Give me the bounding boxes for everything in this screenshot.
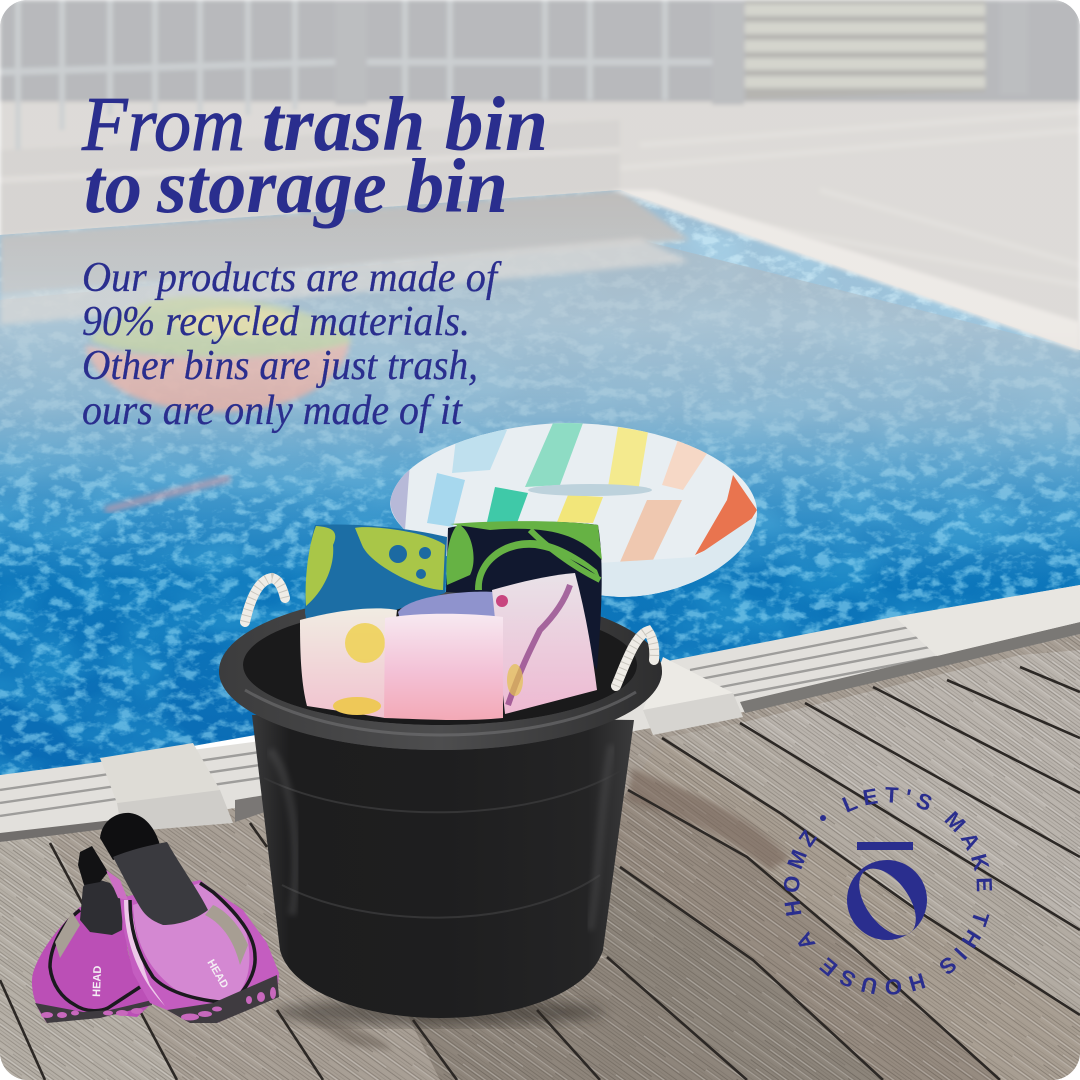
fin brand text: HEAD <box>204 958 230 991</box>
bucket front rim <box>219 665 662 750</box>
swimming pool water <box>0 180 1080 790</box>
subtitle text block: ours are only made of it <box>82 388 463 434</box>
right fin <box>100 813 279 1023</box>
bucket shadow <box>275 998 605 1026</box>
background: fence and upper deck <box>0 0 1080 360</box>
faded white wash over upper photo <box>0 0 1080 568</box>
brand badge <box>784 787 992 995</box>
left floating toy <box>85 297 352 412</box>
rope handle left <box>245 578 285 622</box>
subtitle text block: Our products are made of <box>82 255 502 301</box>
badge dot <box>820 815 826 821</box>
pink reflection on water <box>105 478 230 510</box>
towel: left pastel <box>300 608 397 718</box>
title: From <box>81 81 245 167</box>
badge circular text: LET'S MAKE THIS HOUSE A HOMZ <box>784 787 992 995</box>
towel: front pink <box>384 614 503 720</box>
towel: blue and green <box>305 524 447 618</box>
title <box>81 96 544 228</box>
subtitle text block: Other bins are just trash, <box>82 343 478 389</box>
towel: navy and green <box>446 521 602 670</box>
fin brand text: HEAD <box>91 965 104 997</box>
pool float ring <box>390 423 757 600</box>
lower wooden deck <box>0 620 1080 1080</box>
title: storage bin <box>156 143 508 229</box>
towel: right pink <box>492 573 597 714</box>
title: to <box>84 143 142 229</box>
subtitle text block: 90% recycled materials. <box>82 299 470 345</box>
logo ring <box>847 860 927 940</box>
left fin <box>32 846 152 1023</box>
logo bar <box>857 842 913 850</box>
coping along far right pool edge <box>612 190 1080 352</box>
pool far wall <box>0 190 690 295</box>
bucket body <box>252 715 634 1018</box>
stone block left <box>100 743 233 832</box>
stain on plank <box>628 768 790 870</box>
water haze <box>0 244 1080 482</box>
towel: purple <box>398 592 495 616</box>
bucket interior <box>243 605 637 725</box>
wood grain <box>0 620 1080 1080</box>
title: trash bin <box>262 81 548 167</box>
storage bucket <box>219 521 662 1026</box>
bucket outer rim back <box>219 592 662 750</box>
stone block right <box>643 657 743 735</box>
pool coping edge <box>0 585 1080 842</box>
rope handle right <box>616 631 654 686</box>
swim fins <box>32 813 279 1023</box>
subtitle text block <box>82 255 502 434</box>
